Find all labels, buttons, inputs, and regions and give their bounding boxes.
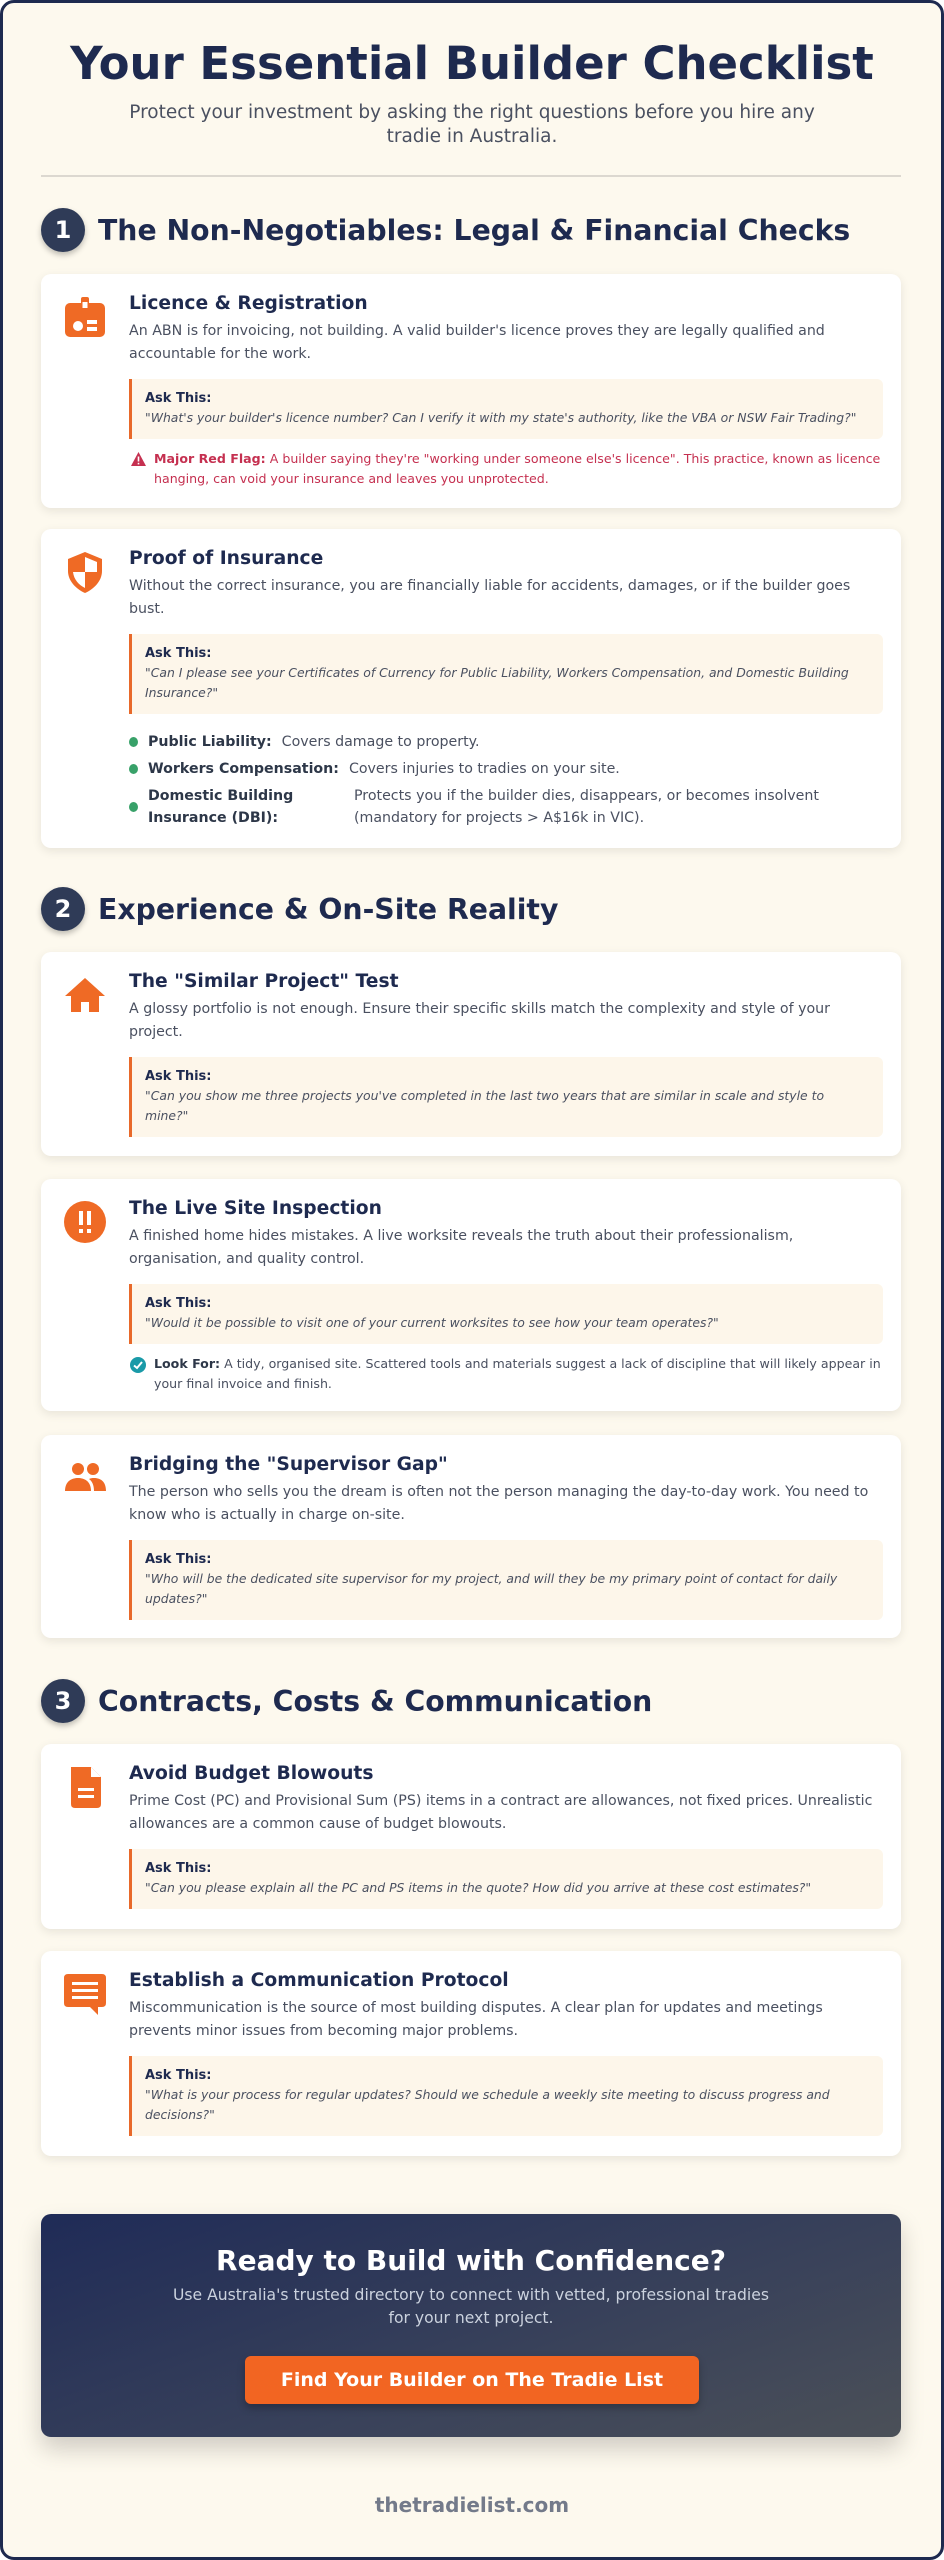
section heading 3 <box>38 1679 652 1729</box>
icon: alert <box>64 1201 106 1243</box>
bullet list: Workers Compensation: <box>148 760 339 776</box>
callout: ask this: Ask This: <box>145 1069 212 1084</box>
panel: supervisor gap: Bridging the "Supervisor Gap" <box>129 1454 448 1475</box>
callout: ask this: "Can I please see your Certificates of Currency for Public Liability, Workers Compensation, and Domestic Building Insurance?" <box>145 665 849 700</box>
callout: ask this: Ask This: <box>145 1296 212 1311</box>
panel: supervisor gap: The person who sells you the dream is often not the person managing the day-to-day work. You need to know who is actually in charge on-site. <box>129 1484 868 1523</box>
panel: proof of insurance: Without the correct insurance, you are financially liable for accidents, damages, or if the builder goes bust. <box>129 578 850 617</box>
callout: ask this: Ask This: <box>145 1861 212 1876</box>
icon: id badge <box>65 297 105 337</box>
callout: ask this: "Who will be the dedicated site supervisor for my project, and will they be my primary point of contact for daily updates?" <box>145 1571 837 1606</box>
section heading 2: 2 <box>55 895 71 923</box>
icon: house <box>65 978 105 1012</box>
bullet list: Protects you if the builder dies, disappears, or becomes insolvent (mandatory for projects > A$16k in VIC). <box>354 788 819 826</box>
callout: ask this: "What is your process for regular updates? Should we schedule a weekly site meeting to discuss progress and decisions?" <box>145 2087 830 2122</box>
callout: ask this <box>129 1540 883 1620</box>
callout: ask this: Ask This: <box>145 646 212 661</box>
icon: people <box>65 1463 106 1491</box>
section heading 1: The Non-Negotiables: Legal & Financial Checks <box>98 214 850 246</box>
panel: communication protocol: Miscommunication is the source of most building disputes. A clear plan for updates and meetings prevents minor issues from becoming major problems. <box>129 2000 823 2039</box>
cta text: Use Australia's trusted directory to connect with vetted, professional tradies for your next project. <box>173 2286 769 2327</box>
callout: ask this: Ask This: <box>145 391 212 406</box>
panel: live site inspection: The Live Site Inspection <box>129 1198 382 1219</box>
callout: ask this <box>129 2056 883 2136</box>
panel: similar project test: A glossy portfolio is not enough. Ensure their specific skills match the complexity and style of your project. <box>129 1001 830 1040</box>
panel: communication protocol: Establish a Communication Protocol <box>129 1970 509 1991</box>
section heading 1 <box>38 208 850 258</box>
callout: ask this: Ask This: <box>145 2068 212 2083</box>
cta button <box>245 2356 699 2404</box>
icon: document <box>71 1767 101 1808</box>
panel: similar project test <box>41 952 901 1156</box>
callout: ask this: "Can you please explain all the PC and PS items in the quote? How did you arrive at these cost estimates?" <box>145 1880 811 1895</box>
panel: communication protocol <box>41 1951 901 2156</box>
bullet list: Domestic Building Insurance (DBI): <box>148 788 293 826</box>
panel: proof of insurance: Proof of Insurance <box>129 548 323 569</box>
section heading 2: Experience & On-Site Reality <box>98 892 558 926</box>
panel: licence & registration: An ABN is for invoicing, not building. A valid builder's licence proves they are legally qualified and accountable for the work. <box>129 323 825 362</box>
bullet list: Covers injuries to tradies on your site. <box>349 760 620 776</box>
icon: shield <box>68 552 102 593</box>
footer: thetradielist.com <box>375 2493 569 2517</box>
bullet list: Covers damage to property. <box>282 734 480 750</box>
cta button: Find Your Builder on The Tradie List <box>281 2369 663 2391</box>
panel: budget blowouts <box>41 1744 901 1929</box>
section heading 3: 3 <box>55 1687 71 1715</box>
cta heading: Ready to Build with Confidence? <box>216 2244 726 2277</box>
section heading 2 <box>38 887 558 937</box>
panel: licence & registration <box>41 274 901 508</box>
panel: licence & registration: Licence & Registration <box>129 293 368 314</box>
callout: ask this: Ask This: <box>145 1552 212 1567</box>
panel: call to action <box>41 2214 901 2437</box>
section heading 3: Contracts, Costs & Communication <box>98 1684 652 1718</box>
panel: similar project test: The "Similar Project" Test <box>129 971 399 992</box>
subtitle: Protect your investment by asking the right questions before you hire any tradie in Australia. <box>129 102 815 147</box>
callout: ask this <box>129 1849 883 1909</box>
bullet list: Public Liability: <box>148 734 272 750</box>
callout: ask this: "Can you show me three projects you've completed in the last two years that are similar in scale and style to mine?" <box>145 1088 824 1123</box>
panel: live site inspection: A finished home hides mistakes. A live worksite reveals the truth about their professionalism, organisation, and quality control. <box>129 1228 793 1267</box>
callout: ask this: "Would it be possible to visit one of your current worksites to see how your team operates?" <box>145 1315 719 1330</box>
callout: ask this <box>129 1057 883 1137</box>
callout: ask this <box>129 1284 883 1344</box>
section heading 1: 1 <box>55 216 71 244</box>
icon: message <box>64 1974 106 2015</box>
title: Your Essential Builder Checklist <box>70 37 874 90</box>
callout: ask this <box>129 379 883 439</box>
callout: red flag: Major Red Flag: A builder saying they're "working under someone else's licence". This practice, known as licence hanging, can void your insurance and leaves you unprotected. <box>154 451 880 486</box>
callout: ask this: "What's your builder's licence number? Can I verify it with my state's authority, like the VBA or NSW Fair Trading?" <box>145 410 856 425</box>
callout: look for: Look For: A tidy, organised site. Scattered tools and materials suggest a lack of discipline that will likely appear in your final invoice and finish. <box>154 1356 881 1391</box>
panel: proof of insurance <box>41 529 901 848</box>
panel: budget blowouts: Prime Cost (PC) and Provisional Sum (PS) items in a contract are allowances, not fixed prices. Unrealistic allowances are a common cause of budget blowouts. <box>129 1793 872 1832</box>
panel: budget blowouts: Avoid Budget Blowouts <box>129 1763 373 1784</box>
panel: supervisor gap <box>41 1435 901 1638</box>
bullet list <box>129 734 819 826</box>
panel: live site inspection <box>41 1179 901 1411</box>
callout: ask this <box>129 634 883 714</box>
